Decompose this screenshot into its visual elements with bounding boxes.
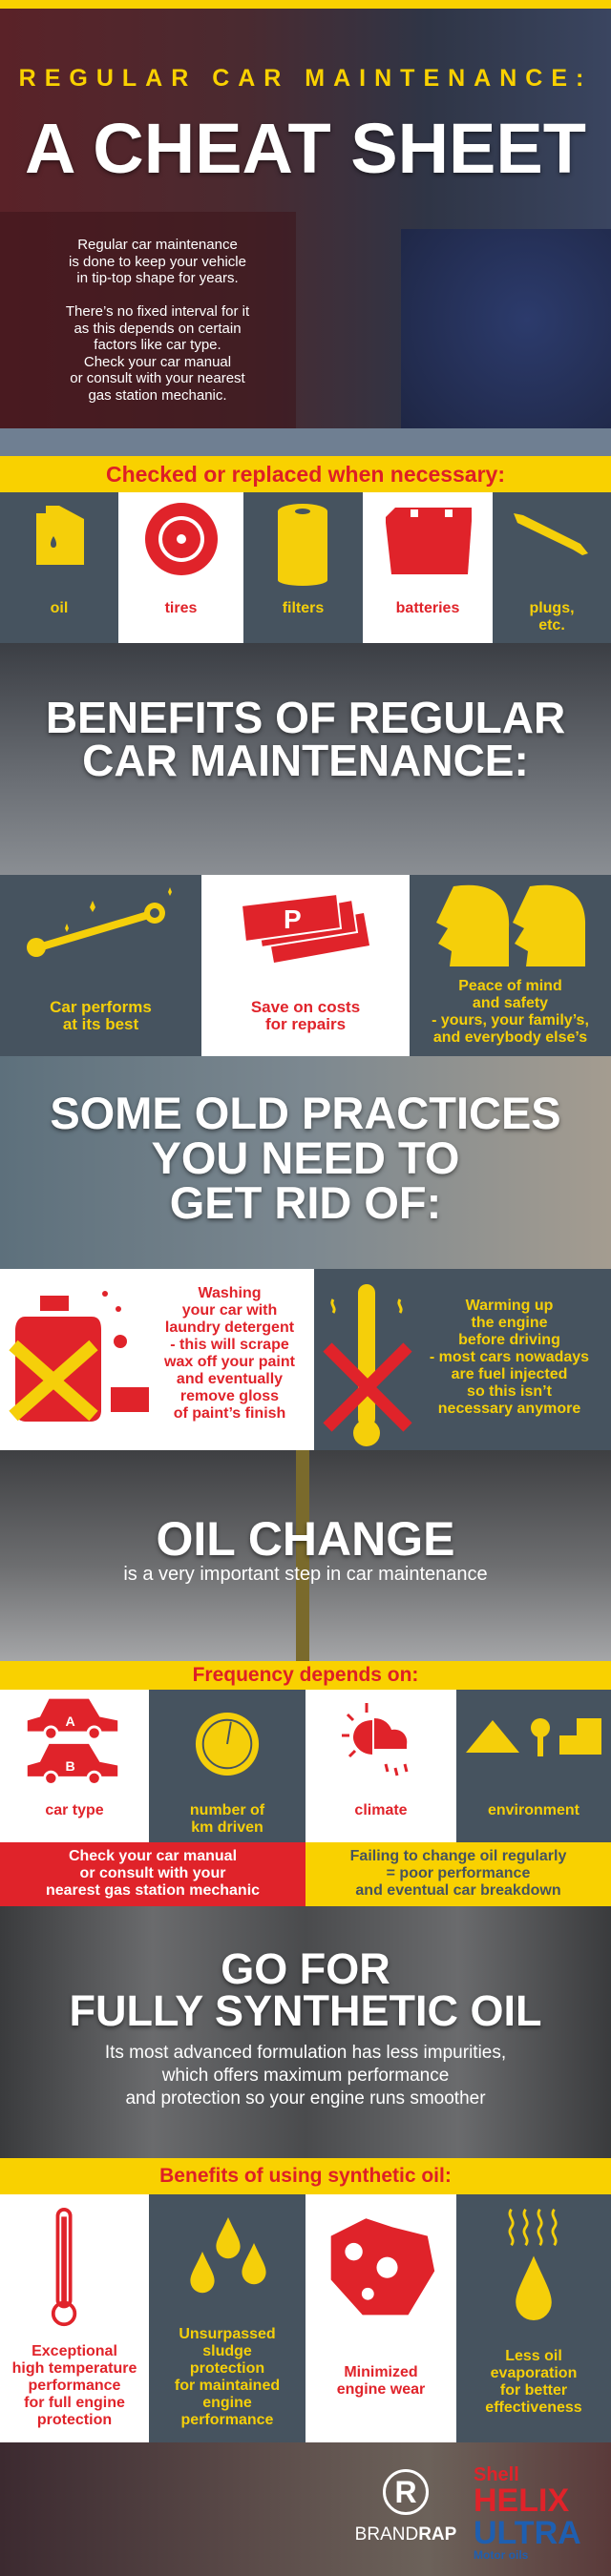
practice: detergent: Washing (198, 1285, 262, 1301)
title: A CHEAT SHEET (25, 109, 586, 188)
photo: car wash background (0, 1056, 611, 1269)
title (19, 65, 592, 188)
intro text: Regular car maintenance (77, 237, 238, 253)
heading: benefits: BENEFITS OF REGULAR (46, 693, 565, 742)
benefit: less evaporation: effectiveness (485, 2399, 582, 2416)
benefit: less evaporation (456, 2194, 611, 2442)
factor: km driven: km driven (191, 1819, 263, 1836)
benefit: sludge protection: performance (181, 2412, 273, 2428)
heading: synthetic oil (69, 1944, 542, 2035)
heading: benefits (46, 693, 565, 785)
callout: check manual: or consult with your (80, 1865, 225, 1881)
heading: old practices: SOME OLD PRACTICES (50, 1088, 561, 1138)
band: checked or replaced (0, 456, 611, 492)
benefit: high temperature: performance (29, 2378, 120, 2394)
callout: failing to change oil: Failing to change oil regularly (350, 1848, 566, 1864)
item: filters (243, 492, 363, 643)
practice: warming up: necessary anymore (438, 1401, 580, 1417)
item: batteries: batteries (396, 600, 459, 616)
practice: warming up: before driving (458, 1332, 560, 1348)
practice: detergent: laundry detergent (165, 1319, 294, 1336)
heading: old practices (50, 1088, 561, 1228)
benefit: save costs: P (284, 904, 302, 934)
logo: shell helix ultra: ULTRA (474, 2515, 581, 2551)
band: synthetic benefits (0, 2158, 611, 2194)
benefit: save costs: for repairs (265, 1015, 346, 1033)
item: plugs (493, 492, 611, 643)
intro text: gas station mechanic. (88, 387, 227, 403)
benefit: peace of mind (410, 875, 611, 1056)
panel: benefits (27, 875, 589, 1056)
benefit: peace of mind: and everybody else’s (433, 1029, 587, 1046)
band: checked or replaced: Checked or replaced when necessary: (106, 462, 505, 487)
intro text: in tip-top shape for years. (76, 270, 239, 286)
panel: items checked (36, 492, 588, 643)
band: synthetic benefits: Benefits of using synthetic oil: (159, 2165, 452, 2187)
intro text: factors like car type. (94, 337, 221, 353)
heading: synthetic oil: GO FOR (221, 1944, 390, 1993)
item: oil: oil (51, 600, 68, 616)
logo: shell helix ultra (474, 2464, 581, 2562)
practice: warming up: - most cars nowadays (430, 1349, 589, 1365)
benefit: sludge protection: Unsurpassed (179, 2326, 276, 2342)
callout: failing to change oil (306, 1842, 611, 1906)
item: oil (0, 492, 118, 643)
item: batteries (363, 492, 493, 643)
item: plugs: etc. (538, 617, 565, 634)
subheading: oil change: is a very important step in car maintenance (123, 1564, 488, 1585)
callout: check manual (0, 1842, 306, 1906)
logo: shell helix ultra: HELIX (474, 2483, 569, 2519)
panel: frequency factors (0, 1690, 601, 1842)
panel: old practices (0, 1269, 589, 1450)
item: tires: tires (165, 600, 197, 616)
practice: warming up: are fuel injected (452, 1366, 567, 1382)
heading: old practices: YOU NEED TO (152, 1132, 459, 1183)
intro text: is done to keep your vehicle (69, 254, 246, 269)
benefit: engine wear: Minimized (344, 2364, 418, 2380)
benefit: less evaporation: evaporation (491, 2365, 577, 2381)
heading: old practices: GET RID OF: (170, 1177, 441, 1228)
factor: climate (306, 1690, 456, 1842)
heading: benefits: CAR MAINTENANCE: (82, 736, 529, 785)
factor: environment (456, 1690, 611, 1842)
text: synthetic description: which offers maximum performance (162, 2066, 449, 2086)
benefit: performs (0, 875, 201, 1056)
benefit: high temperature: protection (37, 2412, 112, 2428)
intro text: There’s no fixed interval for it (66, 303, 249, 320)
benefit: save costs (201, 875, 410, 1056)
logo: shell helix ultra: Motor oils (474, 2548, 528, 2562)
benefit: high temperature: Exceptional (32, 2343, 117, 2359)
factor: climate: climate (354, 1802, 408, 1818)
practice: detergent: your car with (182, 1302, 277, 1319)
band: frequency: Frequency depends on: (193, 1664, 418, 1686)
factor: km driven: number of (190, 1802, 264, 1818)
factor: km driven (149, 1690, 306, 1842)
practice: detergent: and eventually (177, 1371, 283, 1387)
benefit: peace of mind: - yours, your family’s, (432, 1012, 589, 1028)
practice: detergent: - this will scrape (170, 1337, 289, 1353)
callout: failing to change oil: and eventual car breakdown (355, 1882, 561, 1899)
benefit: save costs: Save on costs (251, 998, 360, 1016)
practice: warming up: so this isn’t (467, 1383, 552, 1400)
footer photo: dashboard (0, 2442, 611, 2576)
benefit: engine wear (306, 2194, 456, 2442)
heading: synthetic oil: FULLY SYNTHETIC OIL (69, 1986, 542, 2035)
factor: car type (0, 1690, 149, 1842)
item: tires (118, 492, 243, 643)
logo: shell helix ultra: Shell (474, 2464, 519, 2485)
benefit: sludge protection: protection (190, 2360, 264, 2377)
callout: check manual: nearest gas station mechanic (46, 1882, 260, 1899)
benefit: sludge protection: sludge (202, 2343, 252, 2359)
benefit: sludge protection: for maintained (175, 2378, 280, 2394)
callout: check manual: Check your car manual (69, 1848, 237, 1864)
factor: environment: environment (488, 1802, 579, 1818)
item: filters: filters (283, 600, 324, 616)
intro text: as this depends on certain (74, 321, 242, 336)
intro text: or consult with your nearest (70, 370, 245, 386)
benefit: high temperature: for full engine (24, 2395, 125, 2411)
benefit: performs: at its best (63, 1015, 138, 1033)
factor: car type: A (65, 1714, 75, 1730)
logo: brandrap (355, 2469, 456, 2545)
factor: car type: car type (45, 1802, 104, 1818)
practice: detergent: wax off your paint (164, 1354, 295, 1370)
practice: warming up: Warming up (466, 1298, 553, 1314)
benefit: high temperature: high temperature (12, 2360, 137, 2377)
benefit: less evaporation: for better (500, 2382, 567, 2399)
intro text (66, 237, 250, 403)
panel: synthetic benefits (0, 2194, 582, 2442)
text: synthetic description (105, 2043, 506, 2109)
practice: detergent: remove gloss (180, 1388, 279, 1404)
benefit: sludge protection (149, 2194, 306, 2442)
benefit: sludge protection: engine (202, 2395, 252, 2411)
practice: warming up (314, 1269, 611, 1450)
hero photo background (0, 0, 611, 456)
benefit: high temperature (0, 2194, 149, 2442)
heading: oil change: OIL CHANGE (157, 1512, 454, 1566)
benefit: peace of mind: and safety (473, 995, 548, 1011)
photo: oil pour background (0, 1450, 611, 1661)
callout: failing to change oil: = poor performance (387, 1865, 530, 1881)
factor: car type: B (65, 1759, 75, 1775)
text: synthetic description: and protection so your engine runs smoother (125, 2088, 486, 2109)
benefit: peace of mind: Peace of mind (458, 978, 562, 994)
logo: brandrap: BRANDRAP (355, 2524, 456, 2545)
practice: detergent: of paint’s finish (174, 1405, 285, 1422)
band: frequency (0, 1661, 611, 1690)
practice: detergent (0, 1269, 314, 1450)
intro text: Check your car manual (84, 353, 231, 370)
logo: brandrap: R (394, 2475, 417, 2509)
benefit: performs: Car performs (50, 998, 152, 1016)
item: plugs: plugs, (529, 600, 575, 616)
benefit: engine wear: engine wear (337, 2381, 425, 2398)
practice: warming up: the engine (471, 1315, 548, 1331)
photo: engine background (0, 643, 611, 875)
title: REGULAR CAR MAINTENANCE: (19, 65, 592, 92)
photo: oil bottles background (0, 1906, 611, 2158)
benefit: less evaporation: Less oil (505, 2348, 562, 2364)
text: synthetic description: Its most advanced formulation has less impurities, (105, 2043, 506, 2063)
